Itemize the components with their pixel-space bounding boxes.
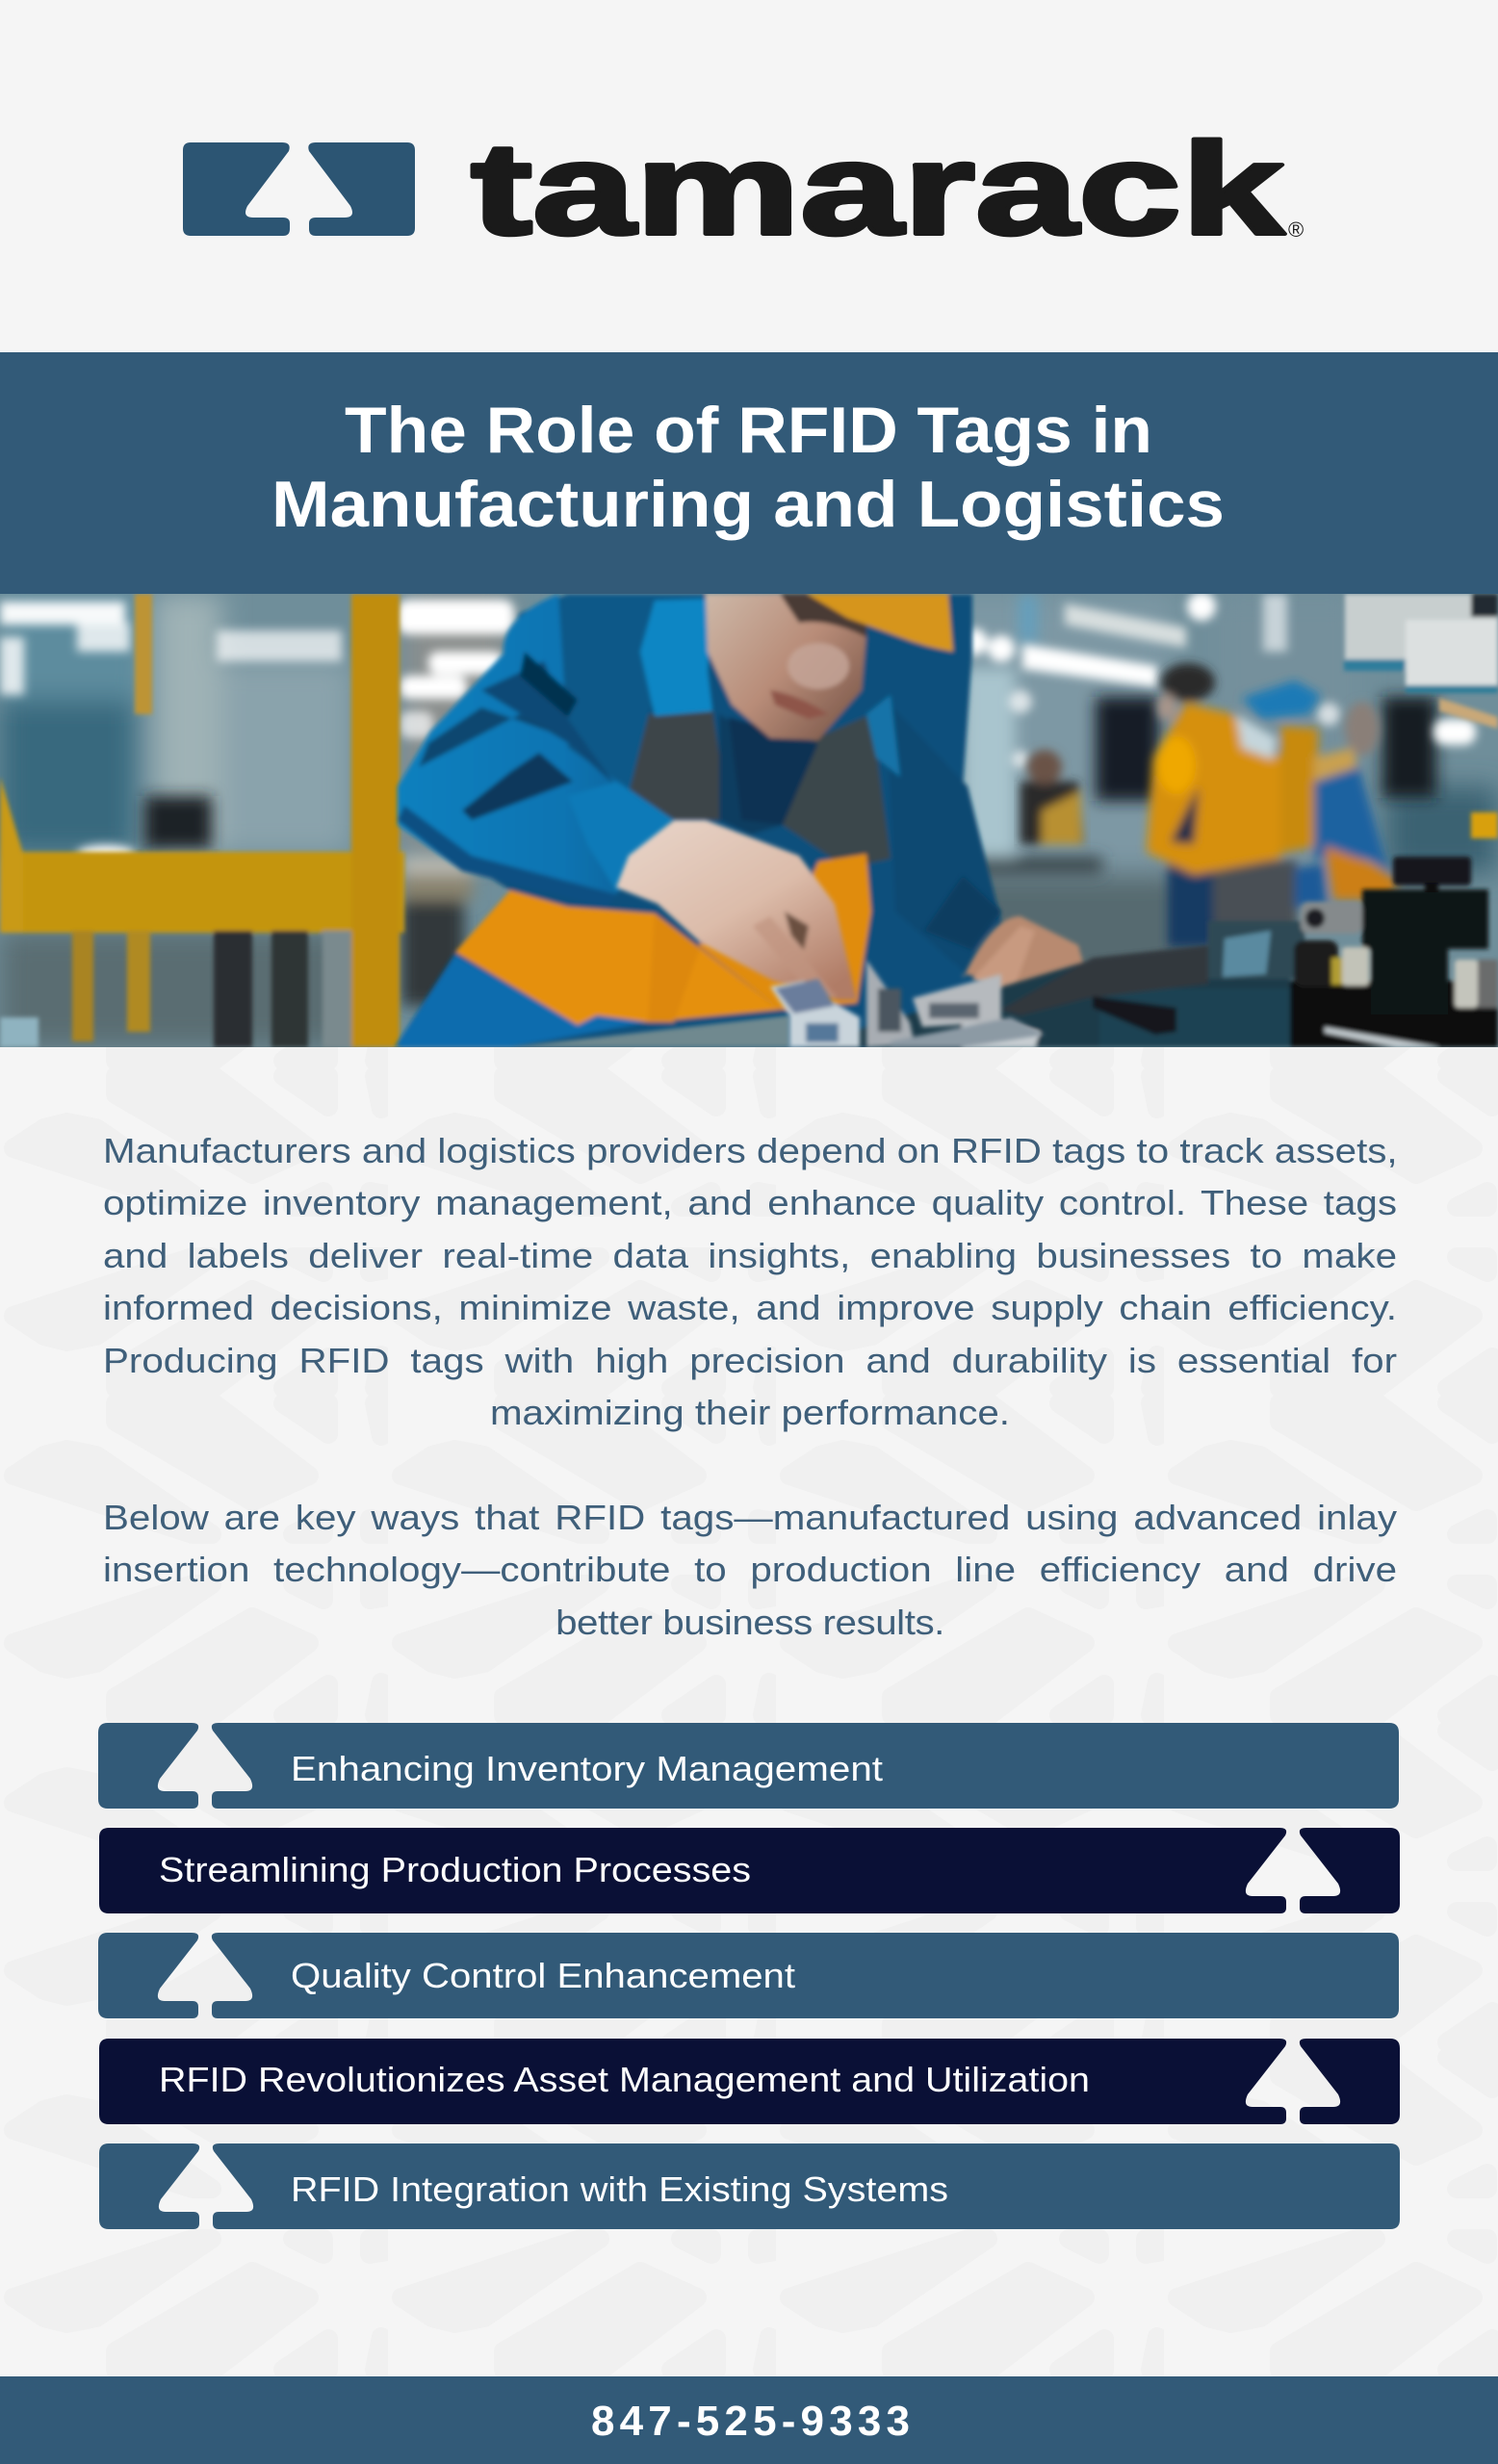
logo wordmark: [471, 116, 1304, 262]
row 3: Quality Control Enhancement: [291, 1956, 795, 1995]
logo mark: [183, 142, 415, 236]
row 1: Enhancing Inventory Management: [291, 1749, 883, 1788]
row 1: [98, 1723, 1399, 1809]
RFID tags: [770, 960, 1045, 1047]
title: [271, 394, 1225, 541]
benefit rows: [98, 1723, 1400, 2229]
machine housing top right: [1344, 594, 1498, 838]
intro paragraph: informed decisions, minimize waste, and improve supply chain efficiency.: [103, 1288, 1397, 1327]
intro paragraph: Producing RFID tags with high precision and durability is essential for: [103, 1341, 1397, 1380]
intro paragraph: [103, 1131, 1398, 1432]
conveyor, tags and machinery: [510, 857, 1498, 1047]
title: Manufacturing and Logistics: [271, 468, 1225, 541]
intro paragraph: and labels deliver real-time data insights, enabling businesses to make: [103, 1236, 1397, 1275]
body background pattern: [0, 1047, 1498, 2376]
row 2: [99, 1828, 1400, 1913]
foreground worker: [395, 594, 1093, 1047]
second paragraph: insertion technology—contribute to production line efficiency and drive: [103, 1550, 1397, 1589]
row 5: [99, 2143, 1400, 2229]
photo: worker applying RFID tags on a factory line: [0, 594, 1498, 1047]
second paragraph: [103, 1498, 1397, 1642]
row 3: [98, 1933, 1399, 2018]
footer band with phone number: [0, 2376, 1498, 2464]
yellow gantry: [0, 594, 404, 1047]
blurred factory background: [0, 592, 1498, 1047]
row 2: Streamlining Production Processes: [159, 1850, 751, 1889]
intro paragraph: optimize inventory management, and enhance quality control. These tags: [103, 1183, 1397, 1222]
row 4: RFID Revolutionizes Asset Management and Utilization: [159, 2060, 1090, 2099]
intro paragraph: maximizing their performance.: [490, 1393, 1010, 1432]
second paragraph: better business results.: [555, 1603, 944, 1642]
logo wordmark: tamarack: [471, 116, 1285, 262]
second paragraph: Below are key ways that RFID tags—manufactured using advanced inlay: [103, 1498, 1397, 1537]
hand applying tag: [616, 820, 1093, 1014]
title: The Role of RFID Tags in: [345, 394, 1152, 467]
logo wordmark: ®: [1288, 218, 1304, 242]
row 4: [99, 2039, 1400, 2124]
logo: [183, 116, 1304, 262]
intro paragraph: Manufacturers and logistics providers depend on RFID tags to track assets,: [103, 1131, 1398, 1170]
title band: [0, 352, 1498, 594]
row 5: RFID Integration with Existing Systems: [291, 2169, 948, 2209]
background workers: [1020, 663, 1400, 947]
footer band with phone number: 847-525-9333: [591, 2398, 910, 2445]
